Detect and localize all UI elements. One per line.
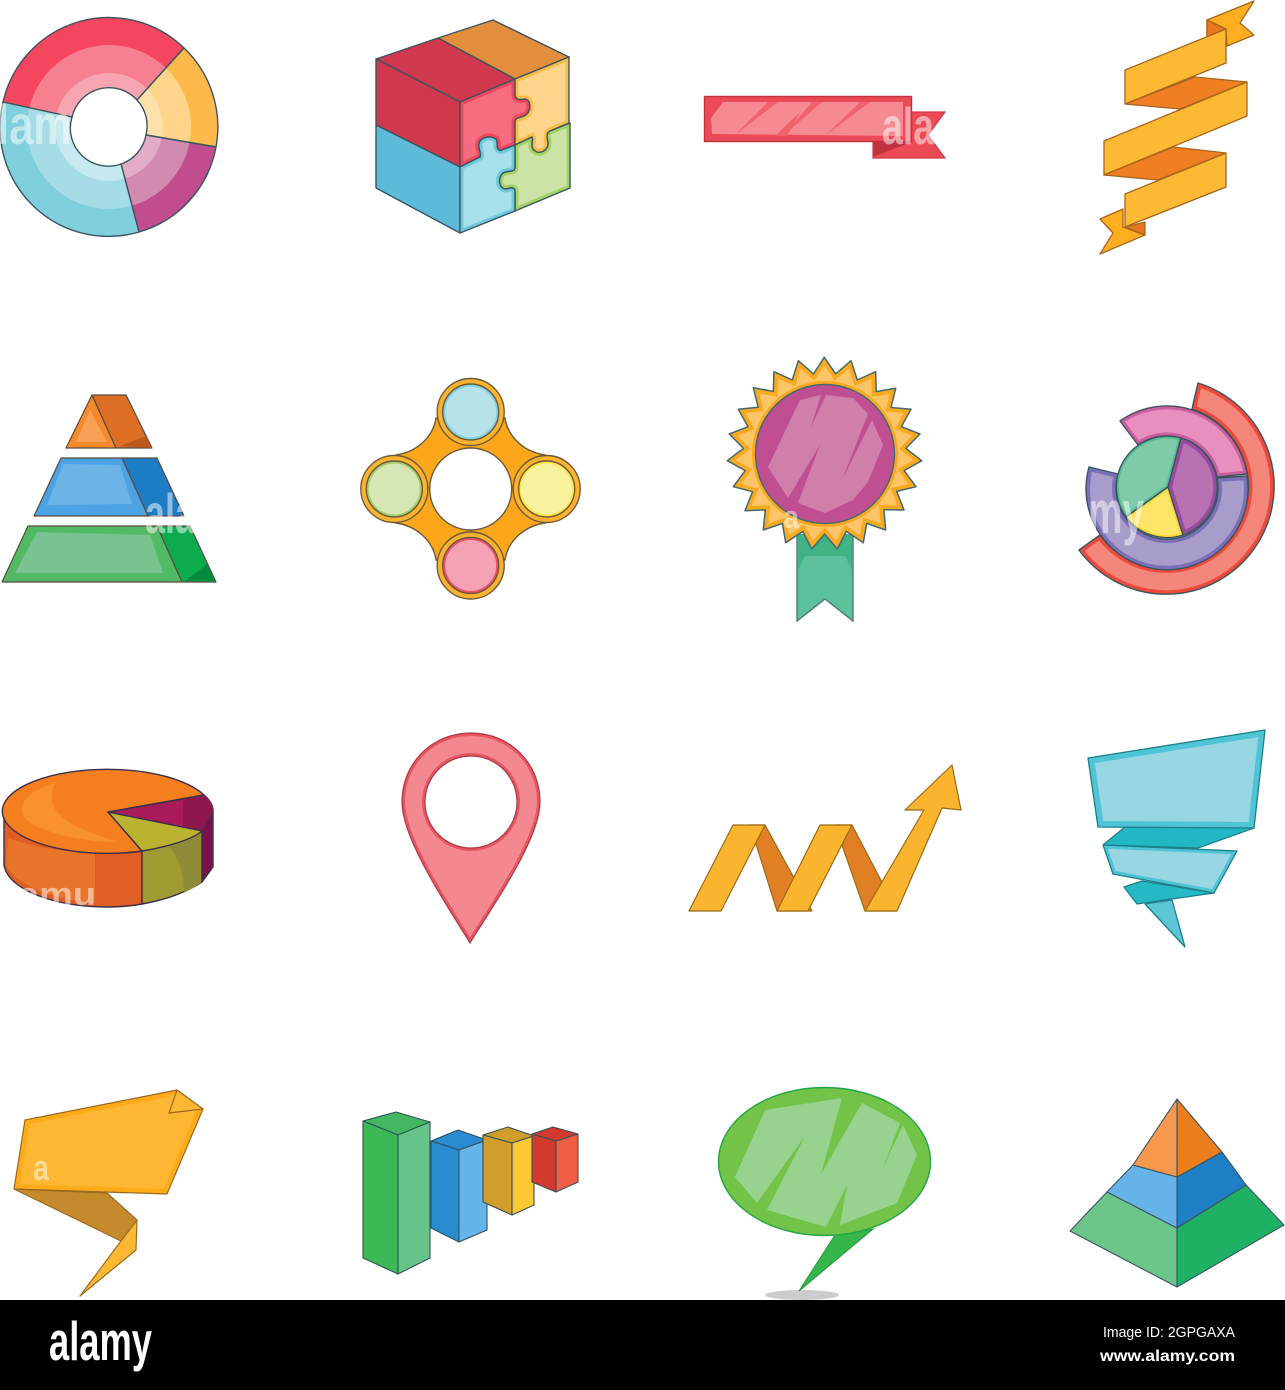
icon: layered flat pyramid [2,395,216,582]
arrow head [865,765,961,911]
icon: puzzle cube [376,20,570,233]
icon: green speech bubble [718,1088,930,1300]
lower tail [80,1220,137,1296]
top tier [66,395,152,448]
main panel [14,1090,203,1194]
bottom tier [2,526,216,582]
purple arc [1086,467,1248,570]
middle tier [34,458,184,516]
icon: four circle diagram [361,378,580,599]
ribbon fold [873,142,912,157]
pie top [2,769,204,853]
blue bar [431,1130,487,1242]
lower fold [14,1189,137,1241]
bottom tier [1070,1185,1284,1287]
icon: award rosette [727,357,922,621]
yellow stroke one [689,825,765,911]
pink arc [1120,406,1247,477]
third band [1125,153,1226,227]
donut segment: yellow [137,48,218,147]
second fold [1104,147,1226,180]
first fold [1125,77,1247,109]
maroon wall [108,795,213,831]
icon: zigzag growth arrow [689,765,961,911]
donut segment: magenta [121,135,216,232]
watermark fragment: a [783,499,799,535]
site url: www.alamy.com [1099,1348,1235,1365]
bubble shadow [765,1290,839,1300]
inner pie: purple [1168,438,1217,535]
top tail [1207,1,1254,46]
icon: 3D bar chart [363,1112,578,1274]
banner tail [1145,900,1185,947]
green bar [363,1112,430,1274]
bubble body [718,1088,930,1236]
ribbon tail [873,112,945,158]
footer logo: alamy [49,1310,152,1372]
icon: segmented donut chart [0,17,218,236]
red bar [532,1127,578,1192]
rosette sunburst [727,357,922,549]
watermark fragment: amu [18,876,96,912]
rosette disc [752,381,898,527]
watermark fragment: a [33,1147,50,1188]
top circle [437,378,504,446]
watermark fragment: ala [882,98,935,156]
image id: Image ID: 2GPGAXA [1103,1324,1235,1341]
cube left face [376,59,460,233]
top tail fold [1207,20,1226,37]
second band [1104,82,1247,175]
yellow stroke two [777,825,852,911]
yellow bar [483,1127,534,1215]
puzzle piece: blue [460,137,515,233]
icon: 3D layered pyramid [1070,1099,1284,1287]
first band [1125,29,1226,104]
bottom tail fold [1125,222,1145,235]
puzzle piece: green [499,123,570,211]
middle tier [1107,1152,1246,1228]
icon: yellow zigzag ribbon [1100,1,1254,254]
watermark fragment: my [1088,479,1144,546]
left circle [361,456,428,522]
orange fold one [750,825,812,911]
olive side [142,831,202,904]
icon: folded blue banner [1088,730,1265,947]
orange fold two [835,825,897,911]
fold shadow two [1124,881,1214,904]
bubble tail [799,1229,873,1291]
puzzle piece: yellow [515,57,569,152]
bottom circle [437,532,504,599]
outer red arc [1079,383,1274,594]
icon: map pin [402,733,540,943]
fold shadow one [1103,827,1254,848]
donut segment: red [3,17,184,117]
olive wedge [108,812,202,851]
maroon side [202,811,213,882]
right circle [513,456,580,522]
icon: 3D pie chart [2,769,213,912]
icon: concentric arc chart [1079,383,1274,594]
inner pie: green [1116,436,1181,517]
icon: red ribbon banner [704,96,945,158]
orange body [396,418,545,560]
watermark fragment: ala [145,482,196,545]
footer bar [0,1300,1285,1390]
rosette ribbon [797,535,853,621]
inner pie: yellow [1126,487,1183,538]
donut segment: cyan [0,102,139,236]
ribbon body [704,96,912,142]
icon: folded yellow banner [14,1090,203,1296]
top tier [1133,1099,1222,1177]
upper panel [1088,730,1265,828]
orange side [4,811,142,907]
cube top face [376,20,569,102]
puzzle piece: red [460,79,530,167]
lower strip [1103,845,1237,893]
corner fold [169,1090,203,1113]
bottom tail [1100,209,1145,254]
